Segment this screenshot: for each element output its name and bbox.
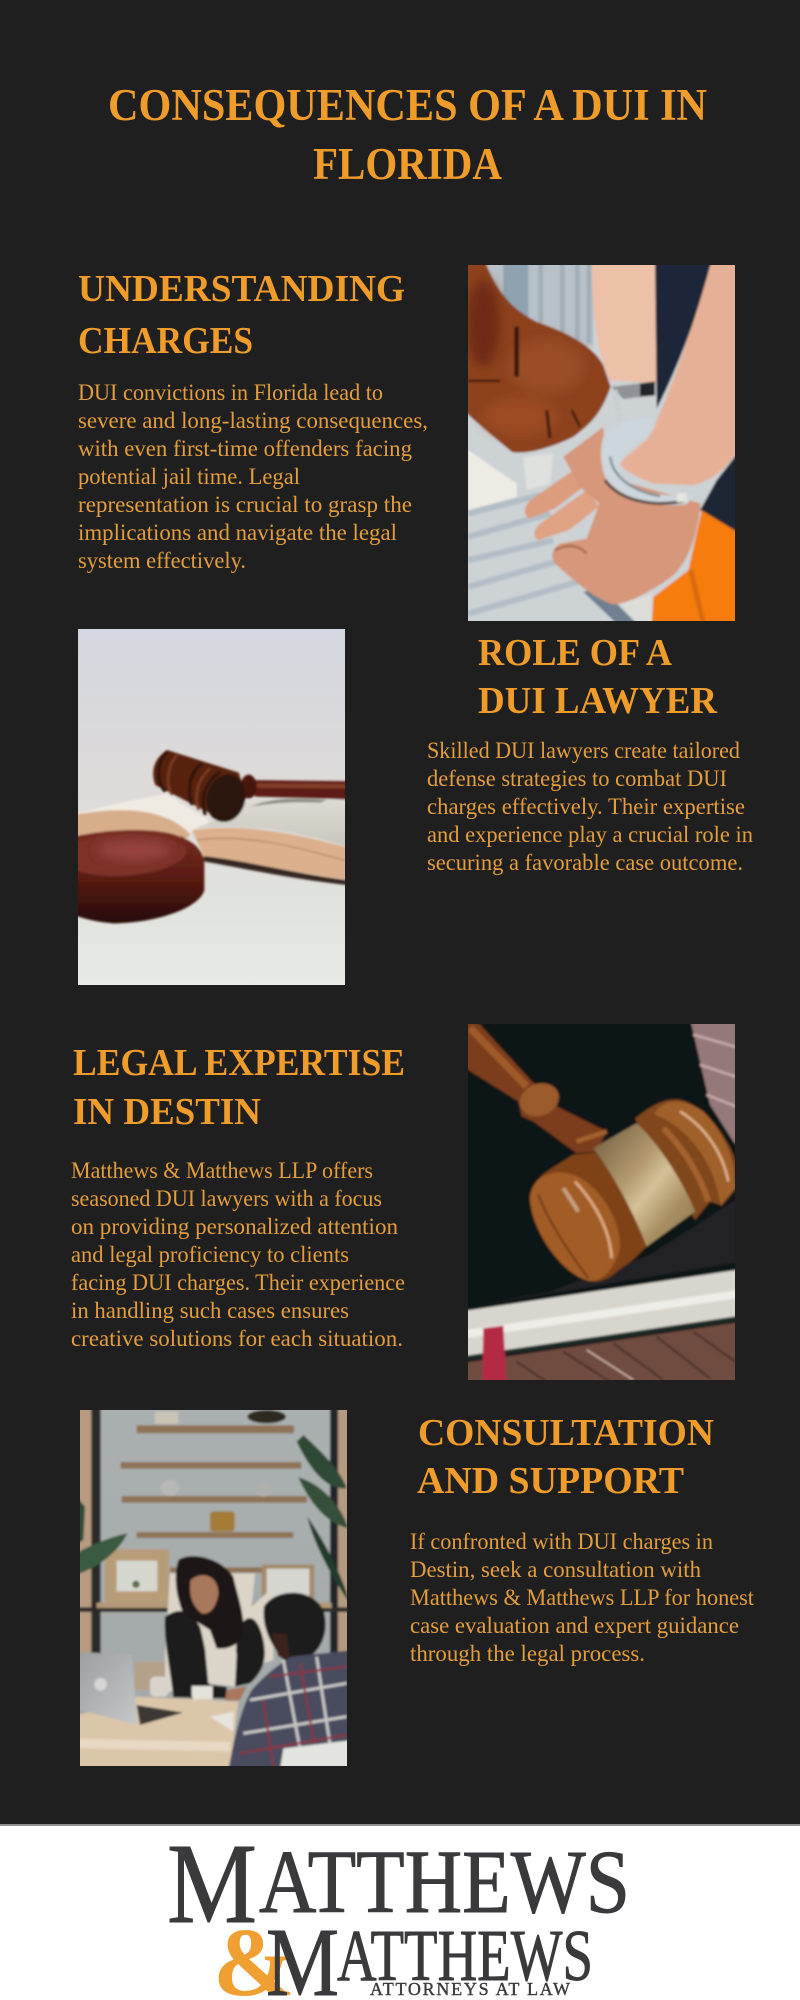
text block: consultation and support: through the legal process. — [410, 1641, 645, 1666]
chair — [165, 1573, 273, 1693]
text block: understanding charges: system effectively. — [78, 548, 246, 573]
text block: role of a DUI lawyer: charges effectively. Their expertise — [427, 794, 745, 819]
title: FLORIDA — [313, 139, 502, 189]
center forearm — [592, 257, 657, 383]
text block: legal expertise in Destin: and legal proficiency to clients — [71, 1242, 349, 1267]
brown hand — [460, 257, 611, 453]
right cap — [654, 1102, 735, 1206]
text block: legal expertise in Destin — [71, 1158, 405, 1351]
photo: wooden gavel with brass band on book — [468, 1024, 735, 1380]
handle — [245, 780, 350, 800]
text block: understanding charges: implications and navigate the legal — [78, 520, 397, 545]
section: role of a DUI lawyer — [74, 629, 753, 985]
heading: consultation and support — [417, 1412, 714, 1502]
man — [264, 1593, 326, 1660]
right forearm — [620, 257, 740, 485]
wood top right — [690, 1018, 743, 1151]
text block: role of a DUI lawyer: securing a favorable case outcome. — [427, 850, 743, 875]
wood floor — [460, 1322, 743, 1385]
left cap — [530, 1172, 620, 1281]
text block: consultation and support — [410, 1529, 755, 1666]
heading: legal expertise in Destin — [73, 1042, 405, 1133]
text block: understanding charges — [78, 380, 428, 573]
photo: gavel on open book — [78, 629, 345, 985]
text block: role of a DUI lawyer: Skilled DUI lawyers create tailored — [427, 738, 740, 763]
heading: consultation and support: CONSULTATION — [418, 1412, 714, 1454]
text block: legal expertise in Destin: creative solutions for each situation. — [71, 1326, 403, 1351]
heading: legal expertise in Destin: IN DESTIN — [73, 1091, 261, 1133]
gavel head — [153, 750, 246, 822]
right rings and cap backing — [635, 1100, 736, 1220]
left rings and cap backing — [530, 1152, 647, 1281]
text block: legal expertise in Destin: on providing personalized attention — [71, 1214, 398, 1239]
shelves — [121, 1425, 307, 1573]
section: legal expertise in Destin — [71, 1018, 743, 1385]
book pages — [460, 1269, 743, 1358]
text block: understanding charges: DUI convictions in Florida lead to — [78, 380, 383, 405]
brass band — [593, 1123, 695, 1247]
text block: legal expertise in Destin: Matthews & Matthews LLP offers — [71, 1158, 373, 1183]
cup — [192, 1686, 213, 1703]
certificates — [105, 1549, 169, 1603]
pants — [652, 510, 740, 627]
text block: consultation and support: Destin, seek a consultation with — [410, 1557, 701, 1582]
photo: lawyer consultation at desk — [80, 1410, 347, 1766]
shirt — [655, 257, 713, 408]
text block: legal expertise in Destin: facing DUI charges. Their experience — [71, 1270, 405, 1295]
book — [74, 794, 210, 834]
woman — [165, 1611, 227, 1698]
section: consultation and support — [73, 1403, 755, 1770]
white chair — [280, 1740, 353, 1770]
shelf objects — [155, 1412, 178, 1424]
logo: Matthews & Matthews: ATTHEWS — [337, 1915, 593, 1996]
text block: legal expertise in Destin: in handling such cases ensures — [71, 1298, 349, 1323]
logo: Matthews & Matthews: M — [167, 1820, 257, 1947]
photo: handcuffed hands — [468, 265, 735, 621]
desk — [73, 1697, 238, 1770]
text block: role of a DUI lawyer — [427, 738, 753, 875]
text block: understanding charges: representation is crucial to grasp the — [78, 492, 412, 517]
title: CONSEQUENCES OF A DUI IN — [108, 80, 707, 130]
fingers and palm — [525, 470, 582, 519]
logo: Matthews & Matthews: ATTORNEYS AT LAW — [370, 1979, 570, 1999]
heading: understanding charges: CHARGES — [78, 320, 253, 362]
footer band — [0, 1820, 800, 2000]
text block: consultation and support: case evaluation and expert guidance — [410, 1613, 739, 1638]
heading: understanding charges — [78, 268, 405, 362]
heading: role of a DUI lawyer — [478, 632, 718, 722]
frame posts — [73, 1403, 92, 1657]
logo: Matthews & Matthews — [167, 1820, 630, 2000]
heading: role of a DUI lawyer: ROLE OF A — [478, 632, 673, 674]
ribbon — [482, 1326, 507, 1385]
text block: role of a DUI lawyer: and experience play a crucial role in — [427, 822, 753, 847]
cuffs — [612, 382, 655, 399]
title — [108, 80, 707, 189]
text block: understanding charges: potential jail time. Legal — [78, 464, 300, 489]
heading: legal expertise in Destin: LEGAL EXPERTISE — [73, 1042, 405, 1084]
handle — [460, 1018, 607, 1153]
section: understanding charges — [78, 257, 743, 627]
text block: consultation and support: Matthews & Matthews LLP for honest — [410, 1585, 755, 1610]
heading: role of a DUI lawyer: DUI LAWYER — [478, 680, 718, 722]
text block: role of a DUI lawyer: defense strategies to combat DUI — [427, 766, 727, 791]
laptop — [73, 1652, 138, 1725]
sound block — [74, 830, 204, 923]
text block: understanding charges: severe and long-lasting consequences, — [78, 408, 428, 433]
logo: Matthews & Matthews: ATTHEWS — [259, 1833, 630, 1932]
text block: understanding charges: with even first-time offenders facing — [78, 436, 412, 461]
plants — [73, 1533, 127, 1575]
heading: consultation and support: AND SUPPORT — [417, 1460, 684, 1502]
heading: understanding charges: UNDERSTANDING — [78, 268, 405, 310]
text block: legal expertise in Destin: seasoned DUI lawyers with a focus — [71, 1186, 382, 1211]
text block: consultation and support: If confronted with DUI charges in — [410, 1529, 713, 1554]
